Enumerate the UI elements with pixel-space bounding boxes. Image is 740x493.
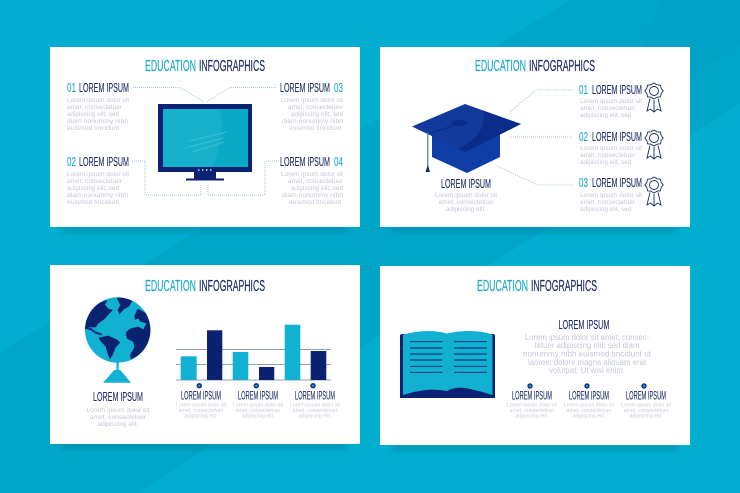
text block 03: [280, 80, 344, 132]
chart label 2: adipiscing elit.: [242, 414, 274, 420]
heading: INFOGRAPHICS: [529, 58, 595, 75]
chart label 1: Lorem ipsum dolor sit: [176, 402, 227, 408]
chart label 2: LOREM IPSUM: [238, 390, 278, 402]
item 3: amet, consectetuer: [624, 408, 669, 414]
item 02: LOREM IPSUM: [592, 129, 642, 144]
item 03: 03: [579, 175, 588, 190]
chart label 2: [233, 383, 284, 420]
item 02: amet, consectetuer: [580, 152, 636, 159]
panel: graduation cap: [380, 47, 690, 227]
item 1: LOREM IPSUM: [512, 390, 552, 402]
text block 02: euismod tincidunt.: [67, 199, 121, 206]
text block 03: LOREM IPSUM: [280, 80, 330, 95]
text block 01: euismod tincidunt.: [67, 125, 121, 132]
text block 04: LOREM IPSUM: [280, 154, 330, 169]
text block: cap caption: LOREM IPSUM: [441, 176, 491, 191]
item 02: [579, 129, 642, 166]
text block 04: amet, consectetuer: [288, 178, 344, 185]
text block 01: amet, consectetuer: [67, 104, 123, 111]
item 3: Lorem ipsum dolor sit: [621, 402, 672, 408]
text block: main paragraph: laoreet dolore magna aliquam erat: [528, 358, 647, 367]
text block 01: diam nonummy nibh: [67, 118, 128, 125]
text block: cap caption: [435, 176, 497, 213]
item 1: [507, 383, 558, 420]
chart label 3: [290, 383, 341, 420]
item 01: LOREM IPSUM: [592, 82, 642, 97]
chart label 1: LOREM IPSUM: [181, 390, 221, 402]
item 02: Lorem ipsum dolor sit: [580, 145, 642, 152]
chart label 3: adipiscing elit.: [298, 414, 332, 420]
heading: EDUCATION: [477, 278, 528, 295]
item 01: adipiscing elit, sed.: [580, 112, 633, 119]
item 03: Lorem ipsum dolor sit: [580, 192, 642, 199]
text block 03: Lorem ipsum dolor sit: [281, 97, 343, 104]
text block 02: adipiscing elit, sed: [67, 185, 119, 192]
text block: cap caption: Lorem ipsum dolor sit: [435, 192, 497, 199]
text block 03: 03: [334, 80, 343, 95]
item 03: amet, consectetuer: [580, 199, 636, 206]
icon: graduation cap: [412, 104, 521, 173]
chart label 3: amet, consectetuer: [292, 408, 338, 414]
icon: open book: [400, 331, 495, 398]
text block: main paragraph: [523, 317, 652, 375]
heading: EDUCATION: [145, 58, 196, 75]
text block 02: amet, consectetuer: [67, 178, 123, 185]
text block 04: euismod tincidunt.: [289, 199, 343, 206]
text block 01: 01: [67, 80, 76, 95]
text block 03: euismod tincidunt.: [289, 125, 343, 132]
text block 02: Lorem ipsum dolor sit: [67, 171, 129, 178]
heading: EDUCATION: [145, 278, 196, 295]
icon: monitor: [158, 104, 252, 180]
item 03: adipiscing elit, sed.: [580, 206, 633, 213]
text block: main paragraph: tetuer adipiscing elit, sed diam: [534, 341, 640, 350]
text block: cap caption: adipiscing elit.: [446, 206, 486, 213]
text block: main paragraph: Lorem ipsum dolor sit amet, consec-: [525, 333, 649, 342]
item 3: LOREM IPSUM: [626, 390, 666, 402]
connector lines: [132, 88, 279, 195]
panel: book: [380, 266, 690, 445]
text block 01: LOREM IPSUM: [79, 80, 129, 95]
chart label 2: amet, consectetuer: [236, 408, 281, 414]
text block: globe caption: LOREM IPSUM: [93, 389, 143, 404]
item 01: Lorem ipsum dolor sit: [580, 98, 642, 105]
text block 04: adipiscing elit, sed: [291, 185, 343, 192]
item 2: [564, 383, 615, 420]
item 2: Lorem ipsum dolor sit: [564, 402, 615, 408]
item 02: adipiscing elit, sed.: [580, 159, 633, 166]
text block 02: [67, 154, 129, 206]
item 2: amet, consectetuer: [566, 408, 612, 414]
item 01: [579, 82, 642, 119]
item 02: 02: [579, 129, 588, 144]
connector lines: [497, 90, 573, 185]
item 2: adipiscing elit.: [572, 414, 606, 420]
chart label 1: adipiscing elit.: [184, 414, 218, 420]
text block: globe caption: amet, consectetuer: [90, 414, 147, 421]
heading: INFOGRAPHICS: [199, 58, 265, 75]
item 3: [621, 383, 672, 420]
icon: medal 1: [645, 83, 663, 112]
text block: main paragraph: nonummy nibh euismod tincidunt ut: [523, 350, 652, 358]
heading: INFOGRAPHICS: [531, 278, 597, 295]
text block 03: adipiscing elit, sed: [291, 111, 343, 118]
item 2: LOREM IPSUM: [569, 390, 609, 402]
text block 01: adipiscing elit, sed: [67, 111, 119, 118]
item 1: amet, consectetuer: [510, 408, 555, 414]
bar chart: [176, 325, 331, 380]
text block 01: Lorem ipsum dolor sit: [67, 97, 129, 104]
text block 02: diam nonummy nibh: [67, 192, 128, 199]
text block 04: diam nonummy nibh: [282, 192, 343, 199]
text block: globe caption: Lorem ipsum dolor sit: [86, 407, 150, 414]
text block: globe caption: adipiscing elit.: [98, 421, 139, 428]
text block: main paragraph: volutpat. Ut wisi enim.: [549, 366, 625, 375]
item 01: amet, consectetuer: [580, 105, 636, 112]
item 03: [579, 175, 642, 213]
chart label 3: LOREM IPSUM: [295, 390, 335, 402]
chart label 2: Lorem ipsum dolor sit: [233, 402, 284, 408]
text block 01: [67, 80, 129, 132]
panel: globe and bar chart: [50, 265, 360, 444]
item 3: adipiscing elit.: [630, 414, 662, 420]
heading: EDUCATION: [475, 58, 526, 75]
text block 04: 04: [334, 154, 343, 169]
chart label 3: Lorem ipsum dolor sit: [290, 402, 341, 408]
text block: cap caption: amet, consectetuer: [438, 199, 494, 206]
icon: medal 2: [645, 130, 663, 159]
item 03: LOREM IPSUM: [592, 175, 642, 190]
icon: medal 3: [645, 177, 663, 206]
panel: monitor: [50, 47, 360, 227]
text block: main paragraph: LOREM IPSUM: [558, 317, 610, 332]
chart label 1: amet, consectetuer: [178, 408, 224, 414]
text block 02: 02: [67, 154, 76, 169]
chart label 1: [176, 383, 227, 420]
text block: globe caption: [86, 389, 150, 428]
item 1: Lorem ipsum dolor sit: [507, 402, 558, 408]
item 1: adipiscing elit.: [516, 414, 548, 420]
heading: INFOGRAPHICS: [199, 278, 265, 295]
icon: globe: [83, 297, 151, 383]
text block 02: LOREM IPSUM: [79, 154, 129, 169]
text block 04: [280, 154, 344, 206]
text block 03: diam nonummy nibh: [282, 118, 343, 125]
text block 04: Lorem ipsum dolor sit: [281, 171, 343, 178]
item 01: 01: [579, 82, 588, 97]
text block 03: amet, consectetuer: [288, 104, 344, 111]
